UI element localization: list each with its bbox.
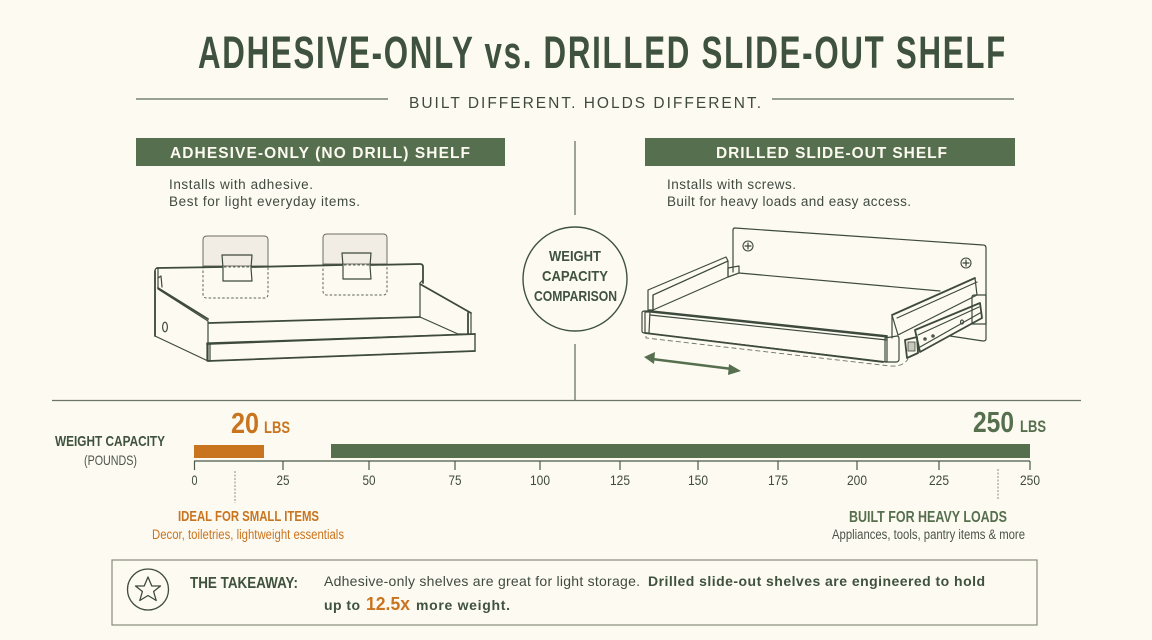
axis label: [55, 433, 165, 468]
text block: takeaway message: Drilled slide-out shelves are engineered to hold: [648, 573, 985, 589]
heading: adhesive-only: [136, 138, 505, 166]
badge: weight capacity comparison: [523, 227, 627, 331]
text block: takeaway message: 12.5x: [366, 594, 410, 614]
value: 250 lbs: 250: [973, 407, 1014, 439]
text block: adhesive description: [169, 177, 360, 209]
arrow: slide direction: [644, 352, 741, 375]
axis with ticks: 200: [847, 472, 867, 488]
icon: drilled shelf illustration: [642, 228, 986, 375]
badge: weight capacity comparison: WEIGHT: [549, 248, 601, 265]
callout: ideal for small items: IDEAL FOR SMALL ITEMS: [178, 508, 319, 525]
adhesive pads: [203, 234, 387, 298]
axis with ticks: 50: [362, 472, 376, 488]
axis label: WEIGHT CAPACITY: [55, 433, 165, 450]
drawer slide: [905, 295, 986, 358]
callout: ideal for small items: [152, 471, 344, 542]
axis with ticks: 250: [1020, 472, 1040, 488]
value: 20 lbs: [231, 408, 290, 440]
heading: the takeaway: THE TAKEAWAY:: [190, 575, 298, 592]
subtitle with rules: BUILT DIFFERENT. HOLDS DIFFERENT.: [409, 95, 761, 112]
back plate: [733, 228, 986, 341]
heading: adhesive-only: ADHESIVE-ONLY (NO DRILL) SHELF: [170, 145, 470, 162]
text block: drilled description: Installs with screws.: [667, 177, 796, 192]
text block: takeaway message: Adhesive-only shelves are great for light storage.: [324, 573, 640, 589]
value: 20 lbs: 20: [231, 408, 259, 440]
axis with ticks: 25: [276, 472, 290, 488]
callout: built for heavy loads: BUILT FOR HEAVY LOADS: [849, 509, 1007, 526]
text block: takeaway message: more weight.: [416, 597, 510, 613]
text block: adhesive description: Best for light everyday items.: [169, 194, 360, 209]
axis with ticks: 0: [192, 472, 198, 488]
value: 250 lbs: LBS: [1020, 417, 1046, 436]
icon: adhesive shelf illustration: [155, 234, 475, 361]
panel: center divider and badge: [523, 141, 627, 400]
callout: built for heavy loads: [832, 469, 1025, 542]
value: 20 lbs: LBS: [264, 418, 290, 437]
axis with ticks: 150: [688, 472, 708, 488]
heading: drilled: [645, 138, 1015, 166]
callout: built for heavy loads: Appliances, tools, pantry items & more: [832, 527, 1025, 542]
badge: weight capacity comparison: COMPARISON: [534, 288, 617, 305]
axis with ticks: 100: [530, 472, 550, 488]
axis with ticks: [192, 461, 1040, 488]
axis label: (POUNDS): [84, 452, 137, 468]
text block: adhesive description: Installs with adhesive.: [169, 177, 313, 192]
text block: drilled description: [667, 177, 911, 209]
axis with ticks: 75: [448, 472, 462, 488]
callout: ideal for small items: Decor, toiletries, lightweight essentials: [152, 527, 344, 542]
chart: weight capacity bars: [55, 407, 1046, 542]
axis with ticks: 125: [610, 472, 630, 488]
bar: drilled 250 lbs: [331, 444, 1030, 458]
badge: weight capacity comparison: CAPACITY: [542, 268, 608, 285]
shelf body: [155, 264, 475, 361]
text block: takeaway message: [324, 573, 985, 614]
text block: drilled description: Built for heavy loads and easy access.: [667, 194, 911, 209]
panel: adhesive-only shelf: [136, 138, 505, 361]
icon: star: [128, 569, 168, 610]
axis with ticks: 175: [768, 472, 788, 488]
shelf tray: [642, 257, 977, 366]
heading: drilled: DRILLED SLIDE-OUT SHELF: [716, 145, 947, 162]
panel: drilled slide-out shelf: [642, 138, 1015, 375]
axis with ticks: 225: [929, 472, 949, 488]
value: 250 lbs: [973, 407, 1046, 439]
bar: adhesive 20 lbs: [194, 445, 264, 458]
panel: the takeaway: [112, 560, 1037, 625]
text block: takeaway message: up to: [324, 597, 360, 613]
